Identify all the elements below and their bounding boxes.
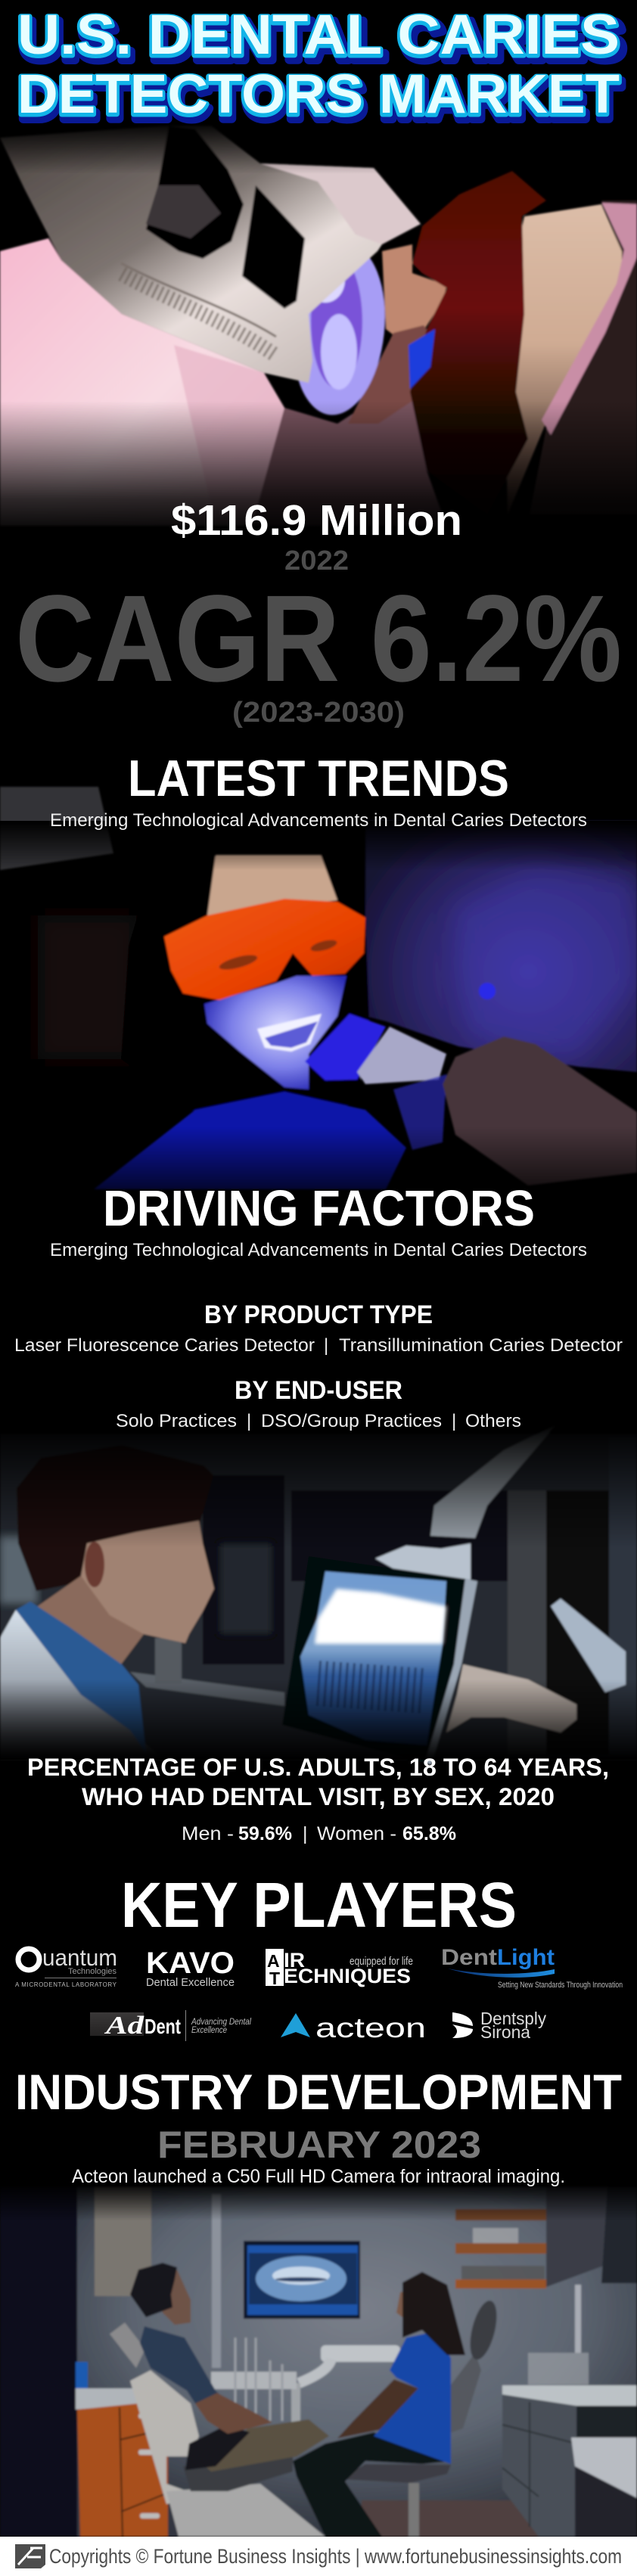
logo: Air Techniques: ECHNIQUES <box>284 1965 411 1987</box>
dental visit stats: 59.6% <box>238 1823 292 1844</box>
dental visit heading: WHO HAD DENTAL VISIT, BY SEX, 2020 <box>82 1783 555 1810</box>
title: U.S. DENTAL CARIES <box>17 3 620 66</box>
segment: by product type: Laser Fluorescence Caries Detector <box>14 1335 315 1356</box>
dental visit stats: Women - <box>317 1823 396 1844</box>
dental visit stats: Men - <box>182 1823 234 1844</box>
title: DETECTORS MARKET <box>20 70 622 131</box>
logo: Air Techniques: A <box>267 1951 280 1971</box>
logo: Quantum Technologies: Technologies <box>68 1967 117 1976</box>
segment: by end-user: Solo Practices <box>116 1411 237 1431</box>
photo: dentist viewing dental x-ray <box>0 1422 637 1765</box>
title <box>17 3 625 131</box>
photo: dental curing device and patient <box>0 121 637 537</box>
segment: by product type: BY PRODUCT TYPE <box>204 1300 433 1329</box>
title: U.S. DENTAL CARIES <box>20 9 625 72</box>
logo: AdDent: Ad <box>104 2012 144 2040</box>
logo: Quantum Technologies <box>15 1944 117 1988</box>
logo: Quantum Technologies: uantum <box>42 1944 117 1971</box>
segment: by end-user: BY END-USER <box>235 1376 402 1405</box>
logo: Air Techniques <box>266 1949 413 1988</box>
title: U.S. DENTAL CARIES <box>17 5 620 67</box>
cagr period: (2023-2030) <box>232 697 405 729</box>
logo: DentLight <box>441 1945 623 1990</box>
dental visit stats: 65.8% <box>402 1823 456 1844</box>
development date: FEBRUARY 2023 <box>157 2124 481 2166</box>
logo: AdDent: Advancing Dental <box>191 2016 251 2027</box>
title: DETECTORS MARKET <box>17 66 620 126</box>
key players heading: KEY PLAYERS <box>121 1869 517 1941</box>
logo: Acteon <box>281 2012 426 2043</box>
photo: patient with orange goggles <box>0 787 637 1290</box>
logo: Air Techniques: equipped for life <box>350 1955 413 1968</box>
segment: by product type: Transillumination Caries Detector <box>339 1335 623 1356</box>
logo: AdDent: Dent <box>144 2015 181 2038</box>
driving factors heading: DRIVING FACTORS <box>103 1180 535 1237</box>
dental visit stats <box>182 1823 456 1844</box>
segment: by product type: | <box>324 1335 328 1356</box>
dental visit stats: | <box>303 1823 307 1844</box>
photo: dental office with x-ray monitor <box>0 2183 637 2537</box>
development text: Acteon launched a C50 Full HD Camera for intraoral imaging. <box>72 2166 565 2187</box>
latest trends heading: LATEST TRENDS <box>128 750 509 807</box>
icon: fortune business insights logo <box>15 2544 45 2568</box>
market size year: 2022 <box>284 545 349 576</box>
logo: Air Techniques: IR <box>284 1949 305 1972</box>
segment: by end-user <box>116 1376 521 1431</box>
logo: Dentsply Sirona <box>452 2009 546 2042</box>
segment: by end-user: DSO/Group Practices <box>261 1411 442 1431</box>
segment: by end-user: | <box>452 1411 456 1431</box>
logo: KaVo: Dental Excellence <box>146 1976 235 1989</box>
latest trends text: Emerging Technological Advancements in Dental Caries Detectors <box>50 810 587 831</box>
logo: DentLight: Light <box>497 1945 555 1970</box>
logo: Dentsply Sirona: Sirona <box>480 2022 530 2042</box>
dental visit heading <box>27 1754 609 1810</box>
logo: DentLight: Dent <box>441 1945 497 1970</box>
segment: by end-user: Others <box>465 1411 521 1431</box>
footer bar <box>0 2537 637 2576</box>
logo: AdDent: Excellence <box>191 2024 227 2035</box>
dental visit heading: PERCENTAGE OF U.S. ADULTS, 18 TO 64 YEARS, <box>27 1754 609 1781</box>
logo: AdDent <box>90 2010 251 2041</box>
segment: by product type <box>14 1300 623 1356</box>
segment: by end-user: | <box>247 1411 251 1431</box>
logo: Dentsply Sirona: Dentsply <box>480 2009 546 2028</box>
market size value: $116.9 Million <box>171 496 462 545</box>
driving factors text: Emerging Technological Advancements in Dental Caries Detectors <box>50 1240 587 1260</box>
logo: KaVo: KAVO <box>146 1947 235 1980</box>
title: DETECTORS MARKET <box>17 64 620 125</box>
logo: Air Techniques: T <box>269 1969 280 1988</box>
logo: Quantum Technologies: A MICRODENTAL LABORATORY <box>15 1981 117 1988</box>
logo: Acteon: acteon <box>315 2012 426 2043</box>
